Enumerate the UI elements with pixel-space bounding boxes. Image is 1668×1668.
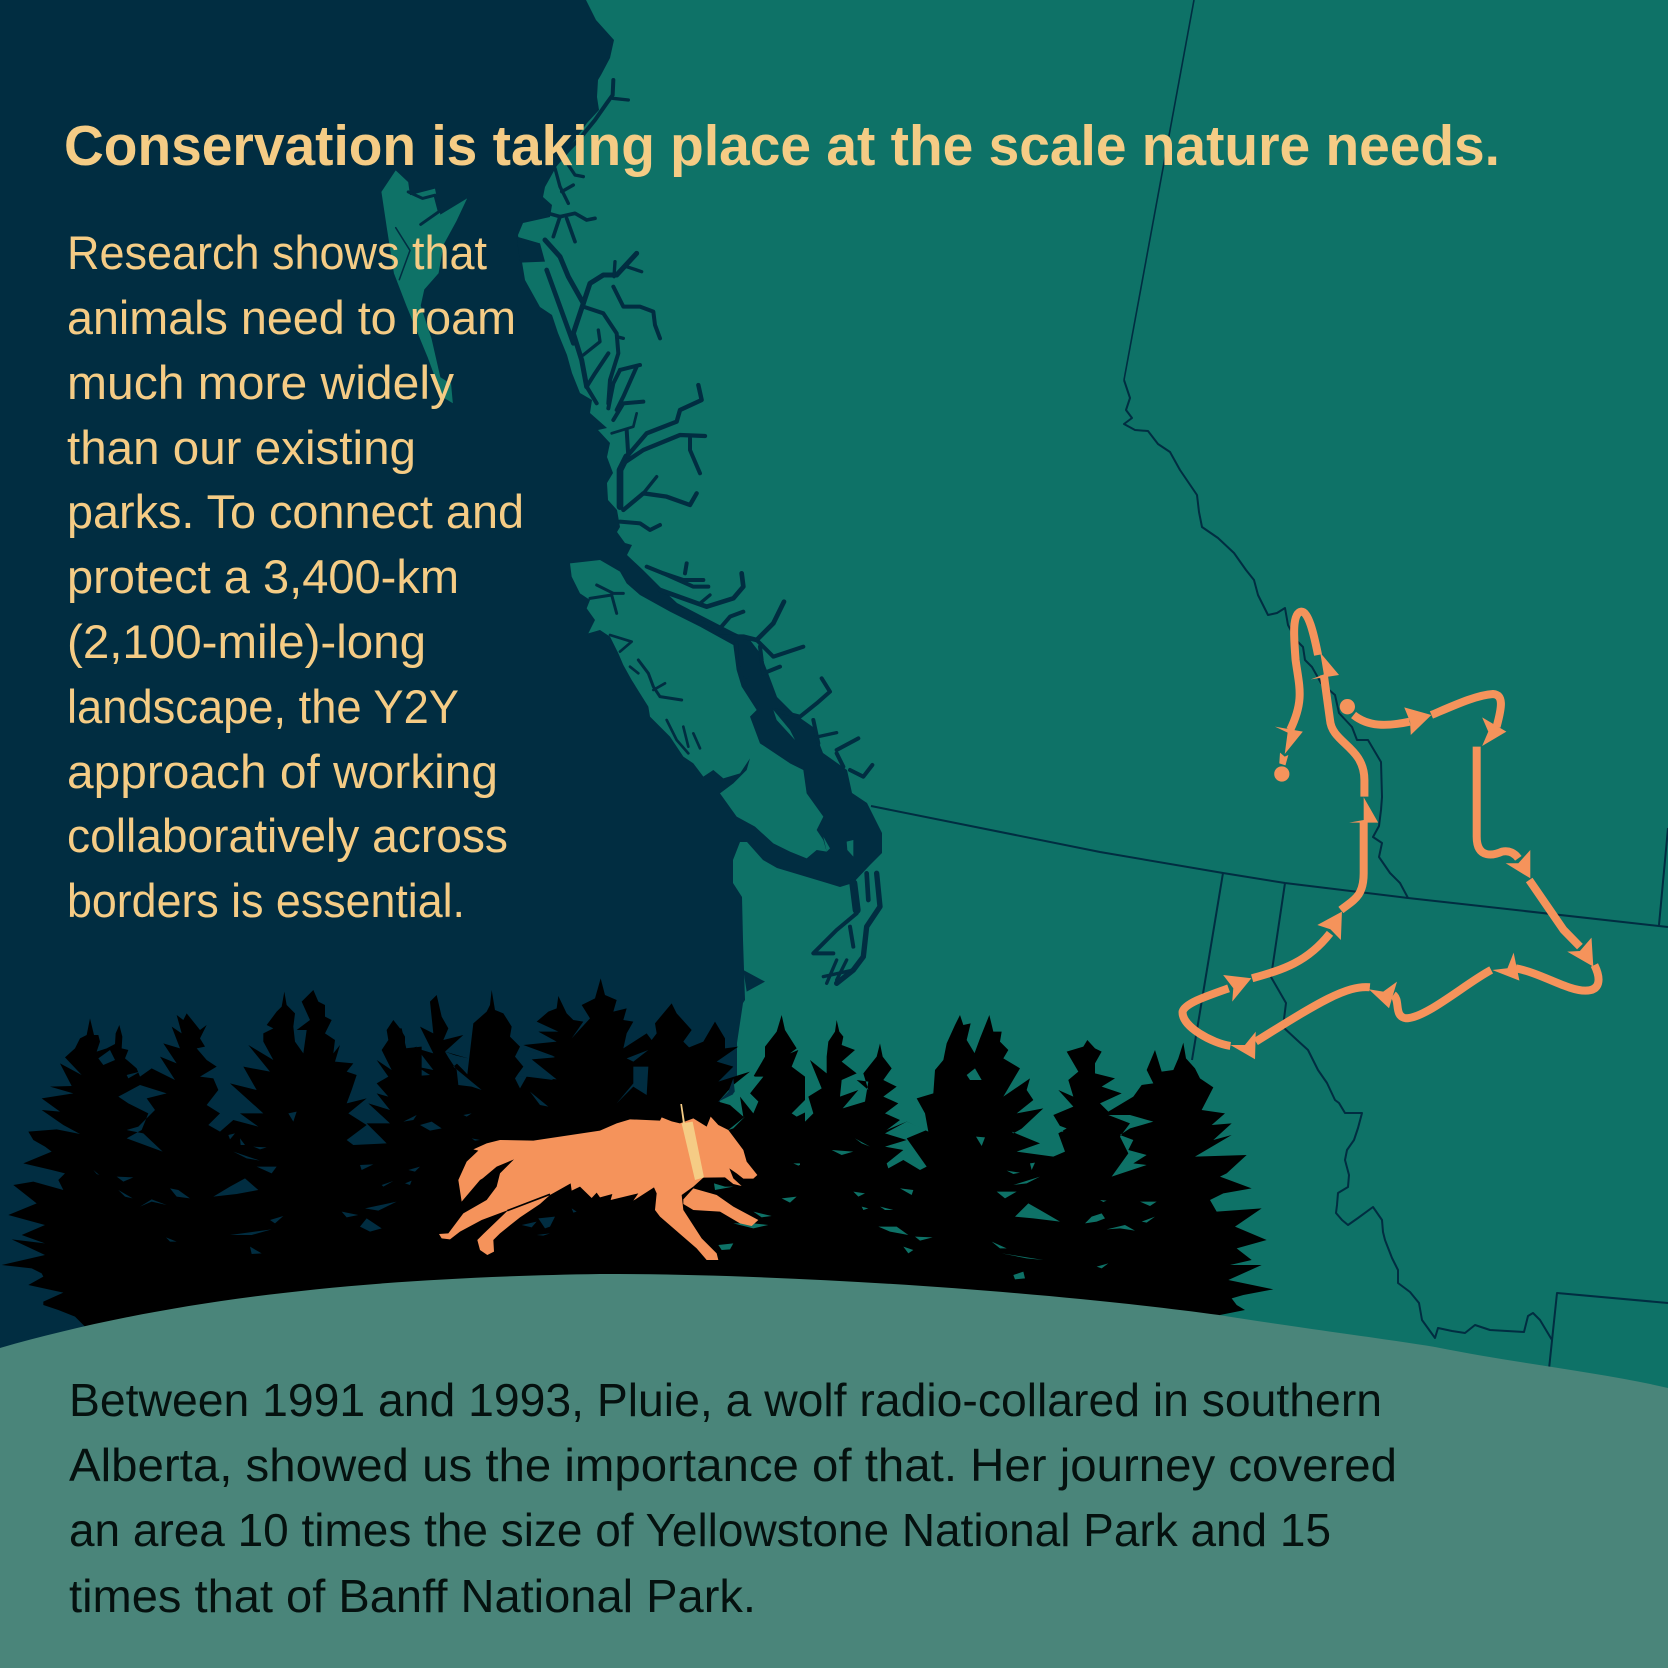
text block: Pluie: Between 1991 and 1993, Pluie, a wolf radio-collared in southern	[69, 1374, 1382, 1426]
text block: Pluie	[69, 1374, 1397, 1622]
text block: research: (2,100-mile)-long	[67, 615, 426, 668]
Puget Sound	[743, 873, 880, 992]
trail arrowheads	[1223, 653, 1593, 1059]
text block: Pluie: an area 10 times the size of Yellowstone National Park and 15	[69, 1504, 1331, 1556]
border: Continental divide upper	[1124, 380, 1408, 898]
border: Washington and Idaho	[1192, 873, 1223, 1060]
text block: research: landscape, the Y2Y	[67, 680, 459, 733]
tree silhouettes	[2, 990, 422, 1337]
island: Vancouver Island	[570, 560, 827, 858]
island inlets	[590, 585, 700, 753]
trail end point	[1274, 766, 1289, 782]
trail start point	[1340, 699, 1355, 714]
text block: Pluie: Alberta, showed us the importance of that. Her journey covered	[69, 1439, 1397, 1491]
gaps: teal	[714, 1073, 810, 1250]
border: Idaho and Montana	[1271, 883, 1552, 1340]
tree silhouettes	[800, 1015, 1273, 1333]
northern coast inlets	[517, 80, 705, 530]
text block: research: protect a 3,400-km	[67, 550, 459, 603]
border: British Columbia and Alberta straight section	[1124, 0, 1194, 380]
text block: research: animals need to roam	[67, 291, 516, 344]
wolf	[439, 1104, 758, 1260]
border: Wyoming	[1549, 1293, 1668, 1369]
holes in the strait	[763, 660, 853, 857]
border: Saskatchewan	[1659, 828, 1668, 925]
provincial and state borders	[871, 0, 1668, 1369]
forest: left trees	[2, 990, 422, 1337]
wolf front leg	[683, 1188, 758, 1226]
forest: middle trees	[400, 978, 810, 1303]
wolf body	[439, 1117, 757, 1260]
text block: research: Research shows that	[67, 226, 487, 279]
Vancouver Island and southern coast	[570, 560, 880, 992]
hill	[0, 1274, 1668, 1668]
mainland inlets	[647, 563, 872, 777]
island: Haida Gwaii	[381, 170, 467, 403]
text block: research: much more widely	[67, 356, 455, 409]
text block: research: than our existing	[67, 421, 416, 474]
tree silhouettes	[400, 978, 805, 1303]
forest: right trees	[800, 1015, 1273, 1333]
text block: research: collaboratively across	[67, 809, 508, 862]
wolf trail with arrows	[1183, 612, 1599, 1059]
title: Conservation is taking place at the scale nature needs.	[64, 114, 1500, 178]
text block: Pluie: times that of Banff National Park.	[69, 1570, 756, 1622]
border: 49th parallel	[871, 806, 1668, 927]
hind leg slit	[507, 1194, 550, 1211]
gaps between right trees	[832, 1068, 1157, 1279]
text block: research: parks. To connect and	[67, 485, 524, 538]
ocean	[0, 0, 882, 1350]
trail lines	[1183, 612, 1599, 1046]
text block: research: approach of working	[67, 745, 498, 798]
radio collar	[680, 1104, 704, 1180]
gaps between left trees	[93, 1050, 417, 1254]
text block: research: borders is essential.	[67, 874, 465, 927]
text block: research	[67, 226, 524, 927]
gaps: navy	[403, 1048, 735, 1236]
